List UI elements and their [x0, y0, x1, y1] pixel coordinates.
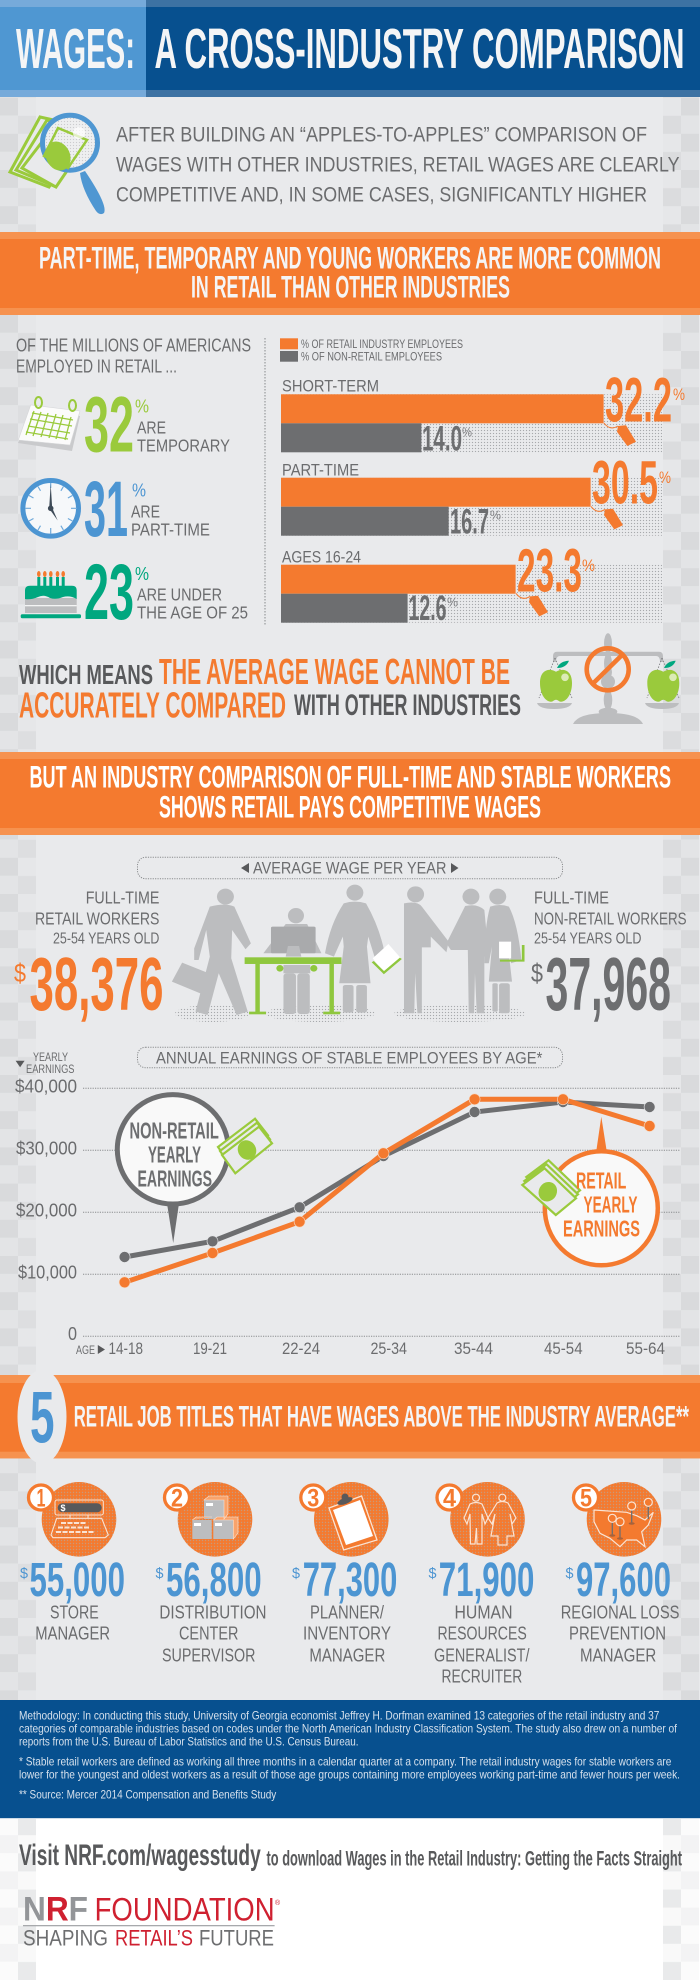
logo: nrf foundation: SHAPING: [23, 1925, 108, 1950]
stat: 32 percent temporary: [84, 380, 230, 469]
y axis title: EARNINGS: [26, 1064, 75, 1076]
job: human resources generalist: GENERALIST/: [434, 1645, 530, 1665]
header banner: [0, 0, 700, 97]
badge 4: 4: [443, 1484, 456, 1512]
job: planner inventory manager: 77,300: [303, 1554, 397, 1607]
bar chart: ages 16-24: [281, 537, 662, 628]
bar chart: part-time: 16.7: [450, 502, 489, 541]
job: planner inventory manager: [292, 1482, 397, 1665]
bar chart: part-time: PART-TIME: [282, 460, 359, 479]
stat: 23 percent under 25: THE AGE OF 25: [137, 603, 248, 623]
bar chart: short-term: %: [462, 425, 472, 440]
icon: money: [522, 1160, 580, 1215]
logo: nrf foundation: FOUNDATION: [95, 1892, 275, 1928]
bar chart: ages 16-24: %: [582, 556, 595, 575]
bar chart: short-term: SHORT-TERM: [282, 376, 379, 395]
badge 3: 3: [307, 1484, 319, 1512]
x axis labels: 25-34: [370, 1339, 407, 1358]
job: distribution center supervisor: DISTRIBUTION: [159, 1602, 266, 1622]
y axis labels: 0: [68, 1324, 77, 1344]
stat: 31 percent part-time: PART-TIME: [131, 519, 210, 539]
text: retail workers wage: [14, 887, 164, 1026]
y axis labels: [15, 1077, 77, 1344]
series: retail: [119, 1094, 655, 1288]
icon: boxes: [192, 1496, 238, 1539]
illustration: workers: [172, 885, 523, 1015]
job: distribution center supervisor: $: [156, 1565, 164, 1582]
bar chart: ages 16-24: %: [447, 595, 458, 610]
intro text: [116, 124, 680, 207]
text: of the millions: OF THE MILLIONS OF AMERICANS: [16, 336, 251, 356]
x axis labels: AGE: [76, 1343, 95, 1357]
stat: 32 percent temporary: ARE: [137, 417, 166, 437]
icon: us map with pins: [594, 1498, 653, 1547]
bar chart: part-time: %: [659, 468, 671, 487]
icon: calendar: [18, 397, 80, 451]
call to action: visit nrf: Visit NRF.com/wagesstudy: [19, 1839, 261, 1872]
icon: cash register: [51, 1500, 108, 1538]
legend: [280, 338, 463, 364]
icon: cash register: $: [60, 1503, 66, 1513]
badge 5: [574, 1484, 598, 1512]
badge 1: [28, 1484, 54, 1512]
heading band: part-time workers: [0, 232, 700, 315]
job: planner inventory manager: PLANNER/: [310, 1602, 384, 1622]
callout: non-retail yearly earnings: [117, 1095, 272, 1243]
text: cannot be compared: WITH OTHER INDUSTRIES: [294, 689, 521, 722]
x axis labels: 55-64: [626, 1339, 665, 1358]
text: retail workers wage: FULL-TIME: [86, 887, 159, 907]
legend: % OF NON-RETAIL EMPLOYEES: [301, 351, 442, 364]
heading band: five job titles: [0, 1370, 700, 1464]
footer: white area: [0, 1818, 700, 1980]
job: planner inventory manager: $: [292, 1565, 301, 1582]
heading band: industry comparison: [0, 752, 700, 835]
stat: 23 percent under 25: %: [135, 564, 149, 584]
job: human resources generalist: HUMAN: [454, 1602, 512, 1622]
logo: nrf foundation: ®: [275, 1899, 281, 1907]
y axis title: [16, 1052, 75, 1076]
badge 5: 5: [580, 1484, 592, 1512]
logo: nrf foundation: RETAIL’S: [115, 1925, 193, 1950]
text: retail workers wage: 38,376: [30, 942, 164, 1026]
bar chart: part-time: [281, 448, 671, 541]
title: WAGES:: [16, 17, 135, 81]
stat: 31 percent part-time: ARE: [131, 501, 160, 521]
series: non-retail: [119, 1096, 655, 1262]
stat: 23 percent under 25: 23: [84, 547, 134, 636]
job: store manager: 55,000: [30, 1554, 125, 1607]
job: store manager: $: [20, 1565, 29, 1582]
y axis labels: $30,000: [16, 1139, 77, 1159]
callout: retail yearly earnings: YEARLY: [584, 1192, 638, 1218]
logo: nrf foundation: FUTURE: [199, 1925, 274, 1950]
icon: clipboard: [329, 1494, 377, 1550]
logo: nrf foundation: [23, 1891, 281, 1950]
icon: two people: [464, 1494, 516, 1545]
footer: methodology: [0, 1700, 700, 1818]
icon: birthday cake: [21, 571, 81, 618]
text: non-retail workers wage: FULL-TIME: [534, 887, 609, 907]
badge 2: [164, 1484, 190, 1512]
x axis labels: [76, 1339, 665, 1358]
text: of the millions: [16, 336, 251, 376]
job: regional loss prevention manager: [561, 1482, 680, 1665]
job: distribution center supervisor: CENTER: [179, 1623, 238, 1643]
stat: 31 percent part-time: 31: [84, 464, 128, 553]
y axis labels: $20,000: [16, 1201, 77, 1221]
x axis labels: 35-44: [454, 1339, 493, 1358]
callout: retail yearly earnings: [522, 1117, 658, 1265]
text: retail workers wage: 25-54 YEARS OLD: [53, 930, 159, 947]
callout: non-retail yearly earnings: NON-RETAIL: [130, 1117, 219, 1143]
icon: scale with apples: [537, 633, 679, 724]
job: planner inventory manager: MANAGER: [309, 1645, 385, 1665]
call to action: visit nrf: [19, 1839, 682, 1872]
text: of the millions: EMPLOYED IN RETAIL ...: [16, 356, 177, 376]
line chart: annual earnings by age: [15, 1047, 680, 1358]
x axis labels: 22-24: [282, 1339, 320, 1358]
job: distribution center supervisor: SUPERVISOR: [162, 1645, 255, 1665]
y axis title: YEARLY: [33, 1052, 68, 1064]
badge 1: 1: [36, 1484, 46, 1512]
heading band: five job titles: 5: [30, 1378, 54, 1459]
job: regional loss prevention manager: MANAGER: [580, 1645, 656, 1665]
stat: 32 percent temporary: TEMPORARY: [137, 435, 230, 455]
bar chart: ages 16-24: 23.3: [517, 537, 582, 605]
job: human resources generalist: $: [428, 1565, 437, 1582]
job: human resources generalist: [428, 1482, 534, 1686]
icon: clock: [23, 480, 78, 536]
job: regional loss prevention manager: PREVENTION: [569, 1623, 666, 1643]
text: non-retail workers wage: 25-54 YEARS OLD: [534, 930, 642, 947]
text: cannot be compared: [19, 651, 521, 725]
job: store manager: MANAGER: [35, 1623, 110, 1643]
x axis labels: 14-18: [108, 1339, 143, 1358]
bar chart: short-term: 14.0: [422, 420, 462, 459]
job: distribution center supervisor: [156, 1482, 266, 1665]
logo: nrf foundation: NRF: [23, 1891, 88, 1929]
stat: 32 percent temporary: 32: [84, 380, 134, 469]
badge 3: [301, 1484, 326, 1512]
text: cannot be compared: WHICH MEANS: [19, 659, 153, 690]
x axis labels: 19-21: [193, 1339, 227, 1358]
callout: non-retail yearly earnings: EARNINGS: [138, 1166, 212, 1192]
text: retail workers wage: RETAIL WORKERS: [35, 908, 159, 928]
text: non-retail workers wage: [531, 887, 687, 1026]
text: non-retail workers wage: $: [531, 958, 543, 988]
y axis labels: $40,000: [15, 1077, 77, 1097]
stat: 23 percent under 25: [84, 547, 248, 636]
bar chart: short-term: [281, 366, 685, 459]
footer: methodology: ** Source: Mercer 2014 Compensation and Benefits Study: [19, 1787, 276, 1801]
stat: 23 percent under 25: ARE UNDER: [137, 585, 222, 605]
job: human resources generalist: RECRUITER: [442, 1666, 522, 1686]
legend: % OF RETAIL INDUSTRY EMPLOYEES: [301, 338, 463, 351]
text: cannot be compared: ACCURATELY COMPARED: [19, 684, 286, 725]
bar chart: part-time: %: [490, 507, 501, 522]
y axis labels: $10,000: [18, 1262, 77, 1282]
text: retail workers wage: $: [14, 958, 26, 988]
job: store manager: [20, 1482, 125, 1643]
stat: 31 percent part-time: %: [132, 481, 146, 501]
icon: money: [218, 1119, 272, 1173]
bar chart: ages 16-24: 12.6: [408, 589, 446, 628]
callout: non-retail yearly earnings: YEARLY: [148, 1142, 201, 1168]
stat: 31 percent part-time: [84, 464, 210, 553]
job: regional loss prevention manager: $: [566, 1565, 574, 1582]
floor shadow dots: [175, 1005, 526, 1022]
footer: methodology: reports from the U.S. Bureau of Labor Statistics and the U.S. Census Bureau.: [19, 1734, 358, 1748]
bar chart: ages 16-24: AGES 16-24: [282, 547, 361, 566]
chart title: ANNUAL EARNINGS OF STABLE EMPLOYEES BY AGE*: [156, 1048, 543, 1067]
job: distribution center supervisor: 56,800: [166, 1554, 262, 1607]
label: average wage per year: AVERAGE WAGE PER YEAR: [253, 858, 446, 877]
job: human resources generalist: 71,900: [439, 1554, 534, 1607]
x axis labels: 45-54: [544, 1339, 583, 1358]
badge 4: [437, 1484, 462, 1512]
bar chart: short-term: %: [673, 385, 685, 404]
stat: 32 percent temporary: %: [135, 397, 149, 417]
job: store manager: STORE: [50, 1602, 99, 1622]
label: average wage per year: [138, 857, 562, 879]
job: planner inventory manager: INVENTORY: [303, 1623, 391, 1643]
icon: money under magnifying glass: [10, 115, 105, 214]
badge 2: 2: [171, 1484, 183, 1512]
job: human resources generalist: RESOURCES: [438, 1623, 527, 1643]
callout: retail yearly earnings: RETAIL: [576, 1168, 626, 1194]
callout: retail yearly earnings: EARNINGS: [563, 1216, 640, 1242]
